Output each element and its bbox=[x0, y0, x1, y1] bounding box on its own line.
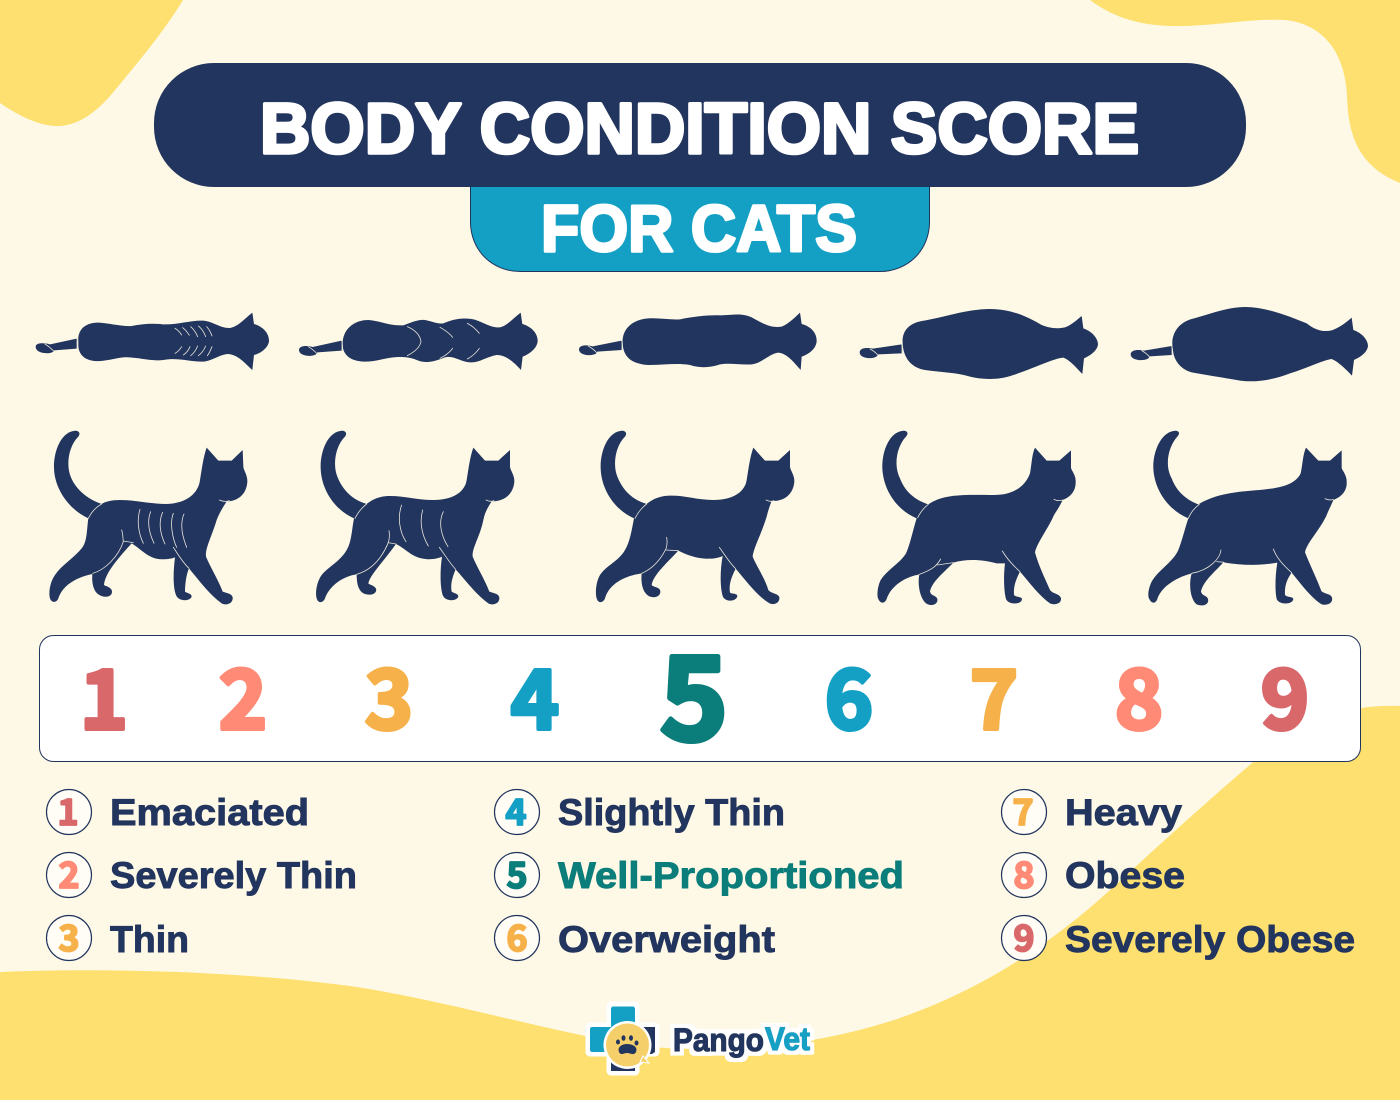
legend item 2: 2 bbox=[58, 847, 80, 899]
legend item 9 bbox=[1002, 910, 1355, 962]
icon: medical cross with paw bubble bbox=[590, 1006, 655, 1071]
legend item 4: 4 bbox=[505, 784, 527, 836]
legend item 5 bbox=[494, 847, 904, 899]
legend item 8: 8 bbox=[1013, 847, 1035, 899]
wordmark bbox=[673, 1021, 810, 1058]
wordmark: Vet bbox=[765, 1021, 810, 1057]
cat 3 top view: ideal bbox=[579, 313, 817, 370]
legend item 7: Heavy bbox=[1065, 792, 1182, 833]
legend item 1 bbox=[46, 784, 309, 836]
legend item 2: Severely Thin bbox=[110, 855, 357, 896]
subtitle tab bbox=[470, 180, 930, 272]
background blob: top left bbox=[0, 0, 183, 126]
title pill bbox=[154, 63, 1246, 187]
legend item 3: 3 bbox=[58, 910, 80, 962]
score digits 1 to 9 bbox=[80, 606, 1309, 774]
legend item 5: 5 bbox=[506, 847, 528, 899]
legend item 6: Overweight bbox=[558, 919, 775, 960]
score digits 1 to 9: 8 bbox=[1115, 634, 1163, 753]
cat 5 side view: severely obese bbox=[1148, 431, 1347, 605]
legend column 2 bbox=[494, 784, 904, 962]
score digits 1 to 9: 1 bbox=[80, 634, 128, 753]
score scale box bbox=[40, 606, 1360, 774]
legend item 1: 1 bbox=[57, 784, 79, 836]
background blob: top right bbox=[1090, 0, 1400, 183]
score digits 1 to 9: 6 bbox=[825, 634, 873, 753]
legend item 4: Slightly Thin bbox=[558, 792, 785, 833]
cat 2 top view: thin bbox=[299, 313, 538, 370]
score digits 1 to 9: 9 bbox=[1261, 634, 1309, 753]
legend item 3 bbox=[46, 910, 189, 962]
title pill: BODY CONDITION SCORE bbox=[260, 90, 1139, 169]
cat 1 top view: emaciated bbox=[36, 313, 269, 370]
legend item 9: Severely Obese bbox=[1065, 919, 1355, 960]
score digits 1 to 9: 7 bbox=[970, 634, 1018, 753]
legend item 7 bbox=[1002, 784, 1182, 836]
score digits 1 to 9: 5 bbox=[660, 606, 728, 774]
cat 4 top view: heavy bbox=[860, 309, 1098, 379]
score digits 1 to 9: 3 bbox=[365, 634, 413, 753]
icon: paw bbox=[616, 1035, 638, 1054]
cat 3 side view: well-proportioned bbox=[596, 431, 794, 604]
legend item 7: 7 bbox=[1012, 784, 1034, 836]
legend item 6: 6 bbox=[506, 910, 528, 962]
legend item 8 bbox=[1002, 847, 1185, 899]
legend item 9: 9 bbox=[1013, 910, 1035, 962]
legend item 6 bbox=[494, 910, 775, 962]
score digits 1 to 9: 2 bbox=[219, 634, 267, 753]
legend item 8: Obese bbox=[1065, 855, 1185, 896]
legend item 1: Emaciated bbox=[110, 792, 309, 833]
legend item 3: Thin bbox=[110, 919, 189, 960]
legend item 4 bbox=[494, 784, 785, 836]
subtitle tab: FOR CATS bbox=[541, 191, 857, 265]
title banner bbox=[154, 63, 1246, 272]
cat 1 side view: emaciated bbox=[49, 431, 247, 604]
cat 2 side view: thin bbox=[316, 431, 514, 604]
legend column 3 bbox=[1002, 784, 1355, 962]
legend item 5: Well-Proportioned bbox=[558, 855, 904, 896]
cat 4 side view: heavy bbox=[877, 431, 1076, 605]
background blob: bottom bbox=[0, 706, 1400, 1100]
score digits 1 to 9: 4 bbox=[511, 634, 559, 753]
wordmark: Pango bbox=[673, 1022, 764, 1058]
legend item 2 bbox=[46, 847, 357, 899]
cat 5 top view: obese bbox=[1131, 307, 1368, 381]
legend column 1 bbox=[46, 784, 357, 962]
PangoVet logo bbox=[590, 1006, 810, 1071]
